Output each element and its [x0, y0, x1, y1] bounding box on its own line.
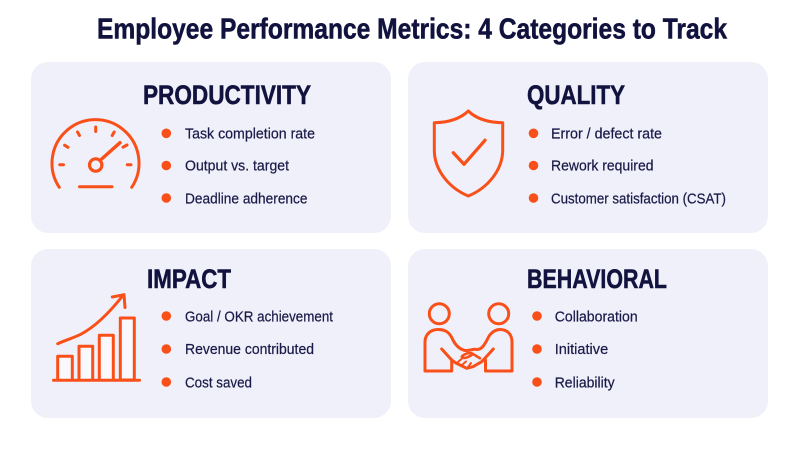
list: quality metrics: Customer satisfaction (CSAT) — [551, 190, 726, 207]
heading: impact: IMPACT — [147, 264, 231, 294]
icon: rising bar chart with arrow — [54, 295, 140, 380]
heading: quality: QUALITY — [527, 80, 625, 110]
icon: two people shaking hands — [425, 304, 512, 371]
list: quality metrics: Rework required — [551, 158, 654, 175]
icon: speedometer gauge — [52, 120, 139, 187]
list: behavioral metrics — [532, 308, 638, 391]
list: productivity metrics — [162, 125, 315, 207]
list: impact metrics: Cost saved — [185, 374, 252, 391]
panel: behavioral — [408, 249, 768, 418]
heading: behavioral: BEHAVIORAL — [527, 264, 667, 294]
list: quality metrics: Error / defect rate — [551, 125, 662, 142]
panel: productivity — [31, 62, 391, 233]
icon: shield with check — [434, 111, 503, 196]
list: behavioral metrics: Collaboration — [555, 308, 638, 325]
list: productivity metrics: Output vs. target — [185, 158, 290, 175]
list: quality metrics — [529, 125, 726, 207]
list: impact metrics: Revenue contributed — [185, 341, 314, 358]
list: productivity metrics: Deadline adherence — [185, 190, 308, 207]
list: behavioral metrics: Reliability — [555, 374, 615, 391]
heading: productivity: PRODUCTIVITY — [143, 80, 311, 110]
panel: quality — [408, 62, 768, 233]
list: productivity metrics: Task completion rate — [185, 125, 315, 142]
list: impact metrics: Goal / OKR achievement — [185, 308, 334, 325]
list: behavioral metrics: Initiative — [555, 341, 608, 358]
list: impact metrics — [162, 308, 334, 391]
panel: impact — [31, 249, 391, 418]
